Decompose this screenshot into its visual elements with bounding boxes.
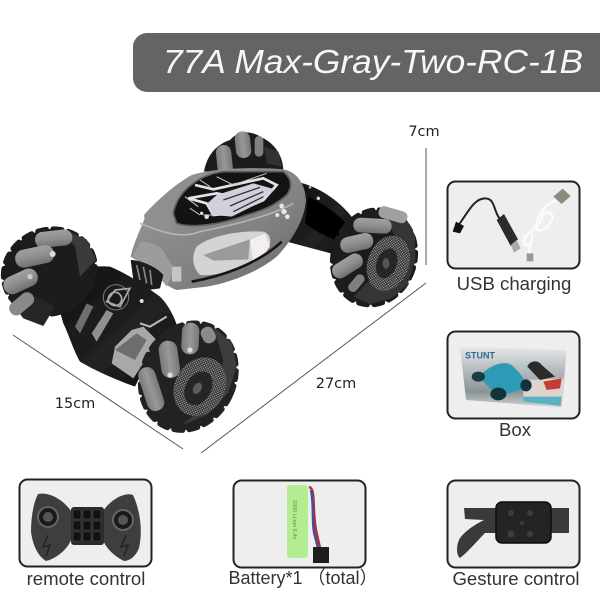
rear top wheel: [204, 131, 283, 176]
icon: remote controller: [31, 494, 141, 561]
front black chassis: [50, 266, 180, 387]
right wheel: [320, 199, 428, 316]
icon: white USB cable: [524, 189, 571, 261]
icon: black USB cable: [453, 198, 521, 253]
rear right arm: [287, 183, 355, 257]
label: USB charging: [457, 273, 571, 294]
grey car body shell: [131, 168, 306, 290]
panel: battery: [228, 480, 378, 588]
dimension: length 27cm: 27cm: [316, 376, 356, 392]
chassis logo: [103, 285, 130, 310]
panel: USB charging: [448, 182, 580, 294]
icon: gesture wristband: [457, 502, 569, 558]
stunt car: [0, 131, 428, 446]
front wheel: [123, 307, 253, 446]
left wheel: [0, 214, 109, 329]
dimension: width 15cm: 15cm: [55, 396, 95, 412]
icon: green battery with connector: 1500 Li-ion 6.4v: [291, 500, 297, 539]
dimension: length 27cm: [201, 283, 426, 453]
dimension: width 15cm: [13, 335, 183, 449]
title banner: 77A Max-Gray-Two-RC-1B: [163, 43, 583, 80]
label: Battery*1 （total）: [228, 568, 378, 588]
label: remote control: [27, 568, 145, 589]
panel: box: [448, 332, 580, 440]
dimension: height 7cm: 7cm: [408, 124, 440, 140]
icon: green battery with connector: [287, 485, 329, 563]
circuit decal on roof: [173, 172, 291, 226]
front joint: [131, 260, 163, 291]
icon: retail box: STUNT: [465, 350, 495, 360]
title banner: [133, 33, 600, 92]
label: Gesture control: [452, 568, 580, 589]
label: Box: [499, 419, 532, 440]
panel: gesture control: [448, 480, 580, 589]
panel: remote control: [20, 480, 152, 589]
